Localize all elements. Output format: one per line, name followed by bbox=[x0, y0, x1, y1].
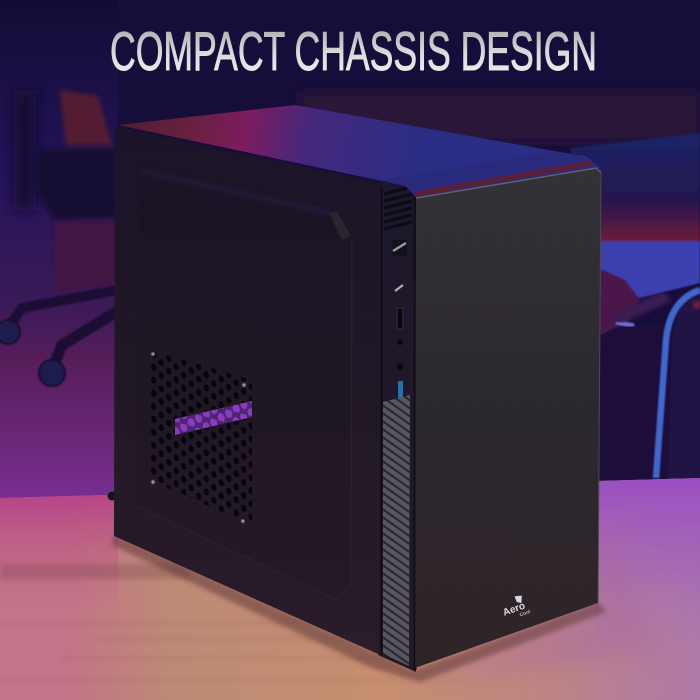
brand logo bbox=[499, 593, 532, 623]
USB port bbox=[397, 308, 403, 329]
blurred room background bbox=[0, 0, 700, 500]
left wall and floor bbox=[0, 0, 118, 500]
case rear foot bbox=[108, 492, 116, 500]
reset button bbox=[395, 285, 403, 291]
top vent slots bbox=[384, 187, 412, 229]
computer case bbox=[108, 105, 601, 672]
brand logo: Aero bbox=[502, 601, 527, 619]
wooden table bbox=[0, 470, 700, 700]
brand logo: Cool bbox=[519, 609, 532, 618]
chair base bbox=[10, 290, 118, 370]
office chair bbox=[36, 90, 118, 292]
ribbed front accent bbox=[383, 395, 410, 666]
audio jack: headphones bbox=[397, 339, 403, 345]
table highlights bbox=[484, 607, 640, 668]
case left side panel bbox=[114, 127, 381, 654]
panel chamfer bbox=[329, 212, 351, 240]
front brushed panel bbox=[382, 152, 601, 668]
audio jack: microphone bbox=[397, 364, 403, 370]
front connector strip bbox=[378, 178, 417, 672]
USB 3 port bbox=[398, 381, 403, 398]
contact shadow bbox=[112, 534, 606, 682]
power button bbox=[392, 240, 407, 256]
blue sofa bbox=[570, 133, 700, 485]
chair casters bbox=[0, 320, 65, 386]
gaming chair on the right bbox=[615, 288, 700, 480]
wood grain bbox=[0, 563, 189, 580]
ventilation grille bbox=[150, 351, 252, 524]
case top face bbox=[118, 105, 560, 181]
